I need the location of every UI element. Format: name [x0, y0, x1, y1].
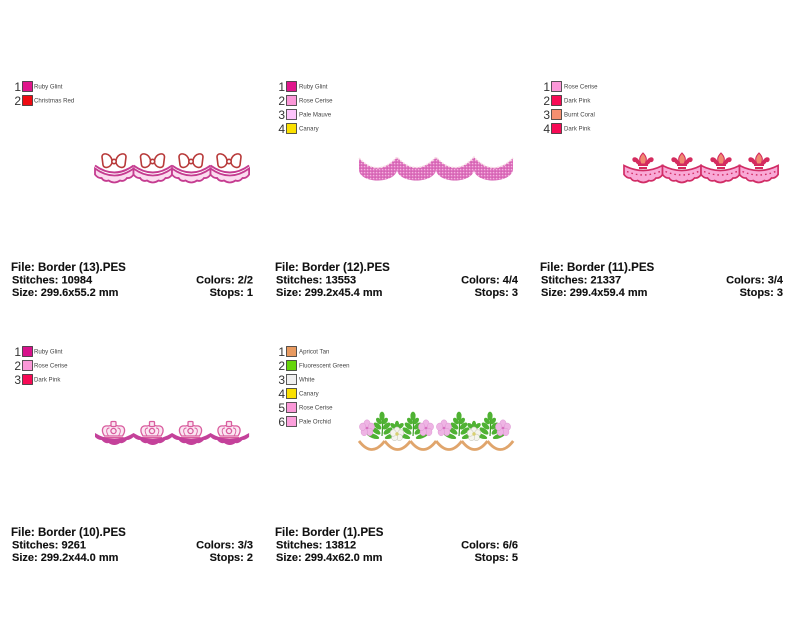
panel: Border (13)	[11, 80, 253, 299]
legend: Border (11) colours: Burnt Coral	[564, 112, 595, 118]
file details: Border (11): Colors: 3/4	[726, 274, 784, 286]
legend: Border (12) colours: Rose Cerise	[299, 98, 333, 104]
legend: Border (13) colours: Ruby Glint	[34, 84, 63, 90]
legend: Border (11) colours: 3	[543, 108, 550, 122]
file details: Border (10): File: Border (10).PES	[11, 527, 126, 539]
legend: Border (12) colours: 3	[278, 108, 285, 122]
legend: Border (12) colours: Ruby Glint	[299, 84, 328, 90]
embroidery: crowns border	[95, 422, 249, 445]
legend: Border (12) colours: 4	[278, 122, 285, 136]
legend: Border (10) colours	[14, 345, 68, 387]
file details: Border (1): File: Border (1).PES	[275, 527, 384, 539]
file details: Border (11): Stitches: 21337	[541, 274, 621, 286]
panel: Border (12)	[275, 80, 519, 299]
file details: Border (12): Stitches: 13553	[276, 274, 356, 286]
legend: Border (10) colours: 3	[14, 373, 21, 387]
panel: Border (10)	[11, 345, 253, 564]
file details: Border (10): Stops: 2	[210, 552, 253, 564]
legend: Border (11) colours: 1	[543, 80, 550, 94]
file details: Border (11): Size: 299.4x59.4 mm	[541, 287, 648, 299]
legend: Border (1) colours: 4	[278, 387, 285, 401]
legend: Border (13) colours: 2	[14, 94, 21, 108]
legend: Border (10) colours: Rose Cerise	[34, 362, 68, 370]
file details: Border (1): Stops: 5	[475, 552, 518, 564]
legend: Border (12) colours: Pale Mauve	[299, 112, 332, 118]
legend: Border (1) colours: White	[299, 376, 315, 384]
file details: Border (10): Stitches: 9261	[12, 540, 86, 552]
file details: Border (13): Size: 299.6x55.2 mm	[12, 287, 119, 299]
legend: Border (1) colours: 1	[278, 345, 285, 359]
legend: Border (1) colours: 2	[278, 359, 285, 373]
file details: Border (13): Colors: 2/2	[196, 274, 253, 286]
legend: Border (10) colours: 1	[14, 345, 21, 359]
file details: Border (1)	[275, 527, 518, 564]
file details: Border (12): Colors: 4/4	[461, 274, 519, 286]
legend: Border (1) colours: Canary	[299, 390, 320, 398]
file details: Border (11): Stops: 3	[740, 287, 783, 299]
legend: Border (10) colours: Dark Pink	[34, 376, 61, 384]
file details: Border (12): Size: 299.2x45.4 mm	[276, 287, 383, 299]
legend: Border (1) colours: 3	[278, 373, 285, 387]
legend: Border (11) colours: 2	[543, 94, 550, 108]
legend: Border (1) colours: Apricot Tan	[299, 348, 329, 356]
file details: Border (13)	[11, 262, 253, 299]
legend: Border (12) colours: 1	[278, 80, 285, 94]
legend: Border (1) colours: Pale Orchid	[299, 418, 331, 426]
legend: Border (1) colours: 5	[278, 401, 285, 415]
legend: Border (11) colours	[543, 80, 598, 136]
legend: Border (1) colours	[278, 345, 349, 429]
embroidery: floral fern border	[359, 412, 513, 450]
file details: Border (12): Stops: 3	[475, 287, 518, 299]
file details: Border (13): Stitches: 10984	[12, 274, 93, 286]
legend: Border (12) colours: Canary	[299, 126, 320, 132]
legend: Border (13) colours	[14, 80, 74, 108]
legend: Border (12) colours	[278, 80, 333, 136]
legend: Border (11) colours: Dark Pink	[564, 98, 591, 104]
legend: Border (12) colours: 2	[278, 94, 285, 108]
file details: Border (10)	[11, 527, 253, 564]
file details: Border (13): File: Border (13).PES	[11, 262, 126, 274]
legend: Border (13) colours: 1	[14, 80, 21, 94]
embroidery: fleur-de-lis border	[624, 153, 778, 182]
file details: Border (11): File: Border (11).PES	[540, 262, 655, 274]
legend: Border (13) colours: Christmas Red	[34, 98, 74, 104]
legend: Border (1) colours: Fluorescent Green	[299, 362, 349, 370]
legend: Border (10) colours: Ruby Glint	[34, 348, 63, 356]
panel: Border (1)	[275, 345, 518, 564]
legend: Border (10) colours: 2	[14, 359, 21, 373]
file details: Border (10): Colors: 3/3	[196, 540, 253, 552]
file details: Border (12): File: Border (12).PES	[275, 262, 390, 274]
panel: Border (11)	[540, 80, 784, 299]
embroidery: mesh scallop border	[359, 157, 513, 180]
legend: Border (11) colours: 4	[543, 122, 550, 136]
legend: Border (1) colours: 6	[278, 415, 285, 429]
legend: Border (11) colours: Rose Cerise	[564, 84, 598, 90]
file details: Border (12)	[275, 262, 519, 299]
file details: Border (1): Colors: 6/6	[461, 540, 518, 552]
file details: Border (1): Size: 299.4x62.0 mm	[276, 552, 383, 564]
file details: Border (1): Stitches: 13812	[276, 540, 356, 552]
legend: Border (1) colours: Rose Cerise	[299, 404, 333, 412]
embroidery: bows border	[95, 154, 249, 182]
file details: Border (11)	[540, 262, 784, 299]
legend: Border (11) colours: Dark Pink	[564, 126, 591, 132]
file details: Border (13): Stops: 1	[210, 287, 253, 299]
file details: Border (10): Size: 299.2x44.0 mm	[12, 552, 119, 564]
